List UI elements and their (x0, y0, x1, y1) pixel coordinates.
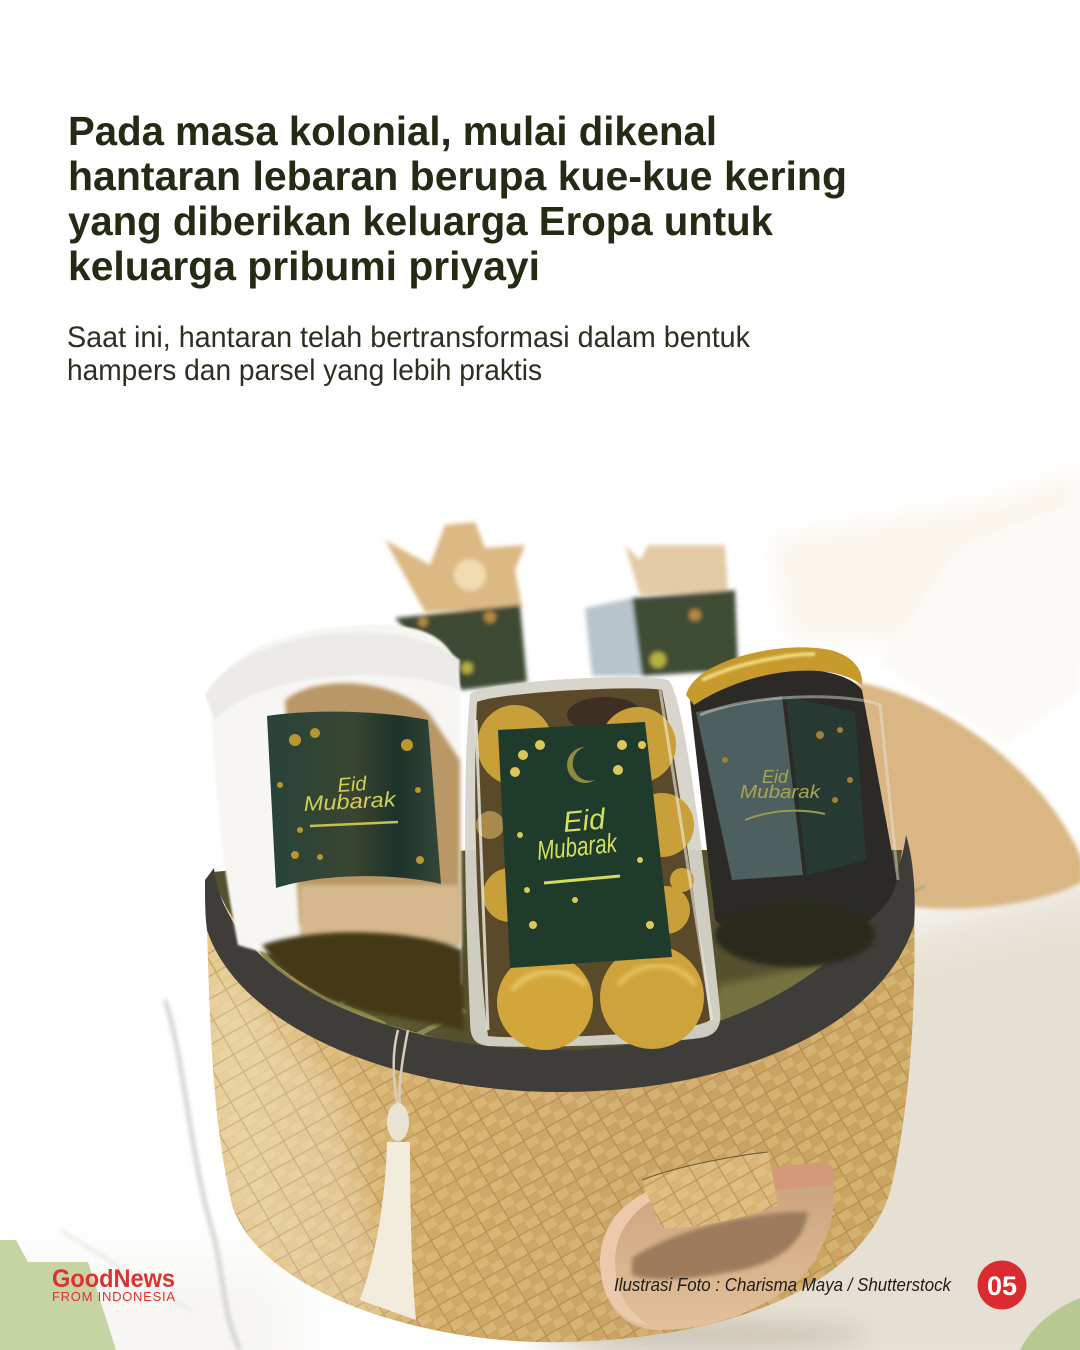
subtitle: Saat ini, hantaran telah bertransformasi dalam bentuk (67, 321, 751, 354)
jar label: Mubarak (303, 788, 398, 816)
logo: GoodNews from Indonesia: GoodNews (52, 1265, 175, 1293)
card label (498, 722, 672, 968)
loop dark recess (632, 1212, 808, 1279)
basket interior (212, 850, 902, 1052)
logo: GoodNews from Indonesia: FROM INDONESIA (52, 1289, 175, 1304)
wicker basket (205, 835, 925, 1347)
card label: Eid (562, 803, 607, 839)
title: hantaran lebaran berupa kue-kue kering (68, 153, 847, 199)
jar label: Eid (337, 773, 368, 797)
logo: GoodNews from Indonesia (52, 1265, 175, 1304)
basket dark rim (205, 835, 915, 1092)
tassel (360, 1030, 416, 1320)
left cookie jar (205, 625, 464, 1030)
cork board and paper card behind basket (770, 470, 1080, 909)
title: Pada masa kolonial, mulai dikenal (68, 108, 717, 154)
title (68, 108, 847, 289)
subtitle (67, 321, 751, 387)
page number badge (978, 1260, 1026, 1310)
basket shadow (530, 1323, 870, 1347)
centre cookie box (465, 677, 720, 1050)
right dark jar (686, 647, 898, 967)
title: keluarga pribumi priyayi (68, 243, 540, 289)
green leaf left (0, 1240, 116, 1350)
gold lid (686, 647, 862, 705)
background jars (385, 522, 738, 690)
subtitle: hampers dan parsel yang lebih praktis (67, 354, 542, 387)
basket handle (600, 1152, 834, 1330)
jar glass (212, 625, 462, 985)
leather loop (600, 1163, 834, 1330)
right dark jar: Eid (762, 767, 789, 787)
photo credit: Ilustrasi Foto : Charisma Maya / Shutterstock (614, 1275, 952, 1295)
box shell (465, 677, 720, 1047)
right dark jar: Mubarak (740, 782, 821, 802)
dried grass strands (816, 886, 925, 995)
woven strap (642, 1152, 778, 1228)
jar label (267, 712, 441, 888)
cookies (476, 705, 694, 934)
title: yang diberikan keluarga Eropa untuk (68, 198, 773, 244)
page number badge: 05 (987, 1271, 1017, 1301)
green leaf right (1020, 1298, 1080, 1350)
loop top-right end (770, 1161, 834, 1190)
card label: Mubarak (535, 828, 619, 866)
basket body (206, 900, 914, 1342)
